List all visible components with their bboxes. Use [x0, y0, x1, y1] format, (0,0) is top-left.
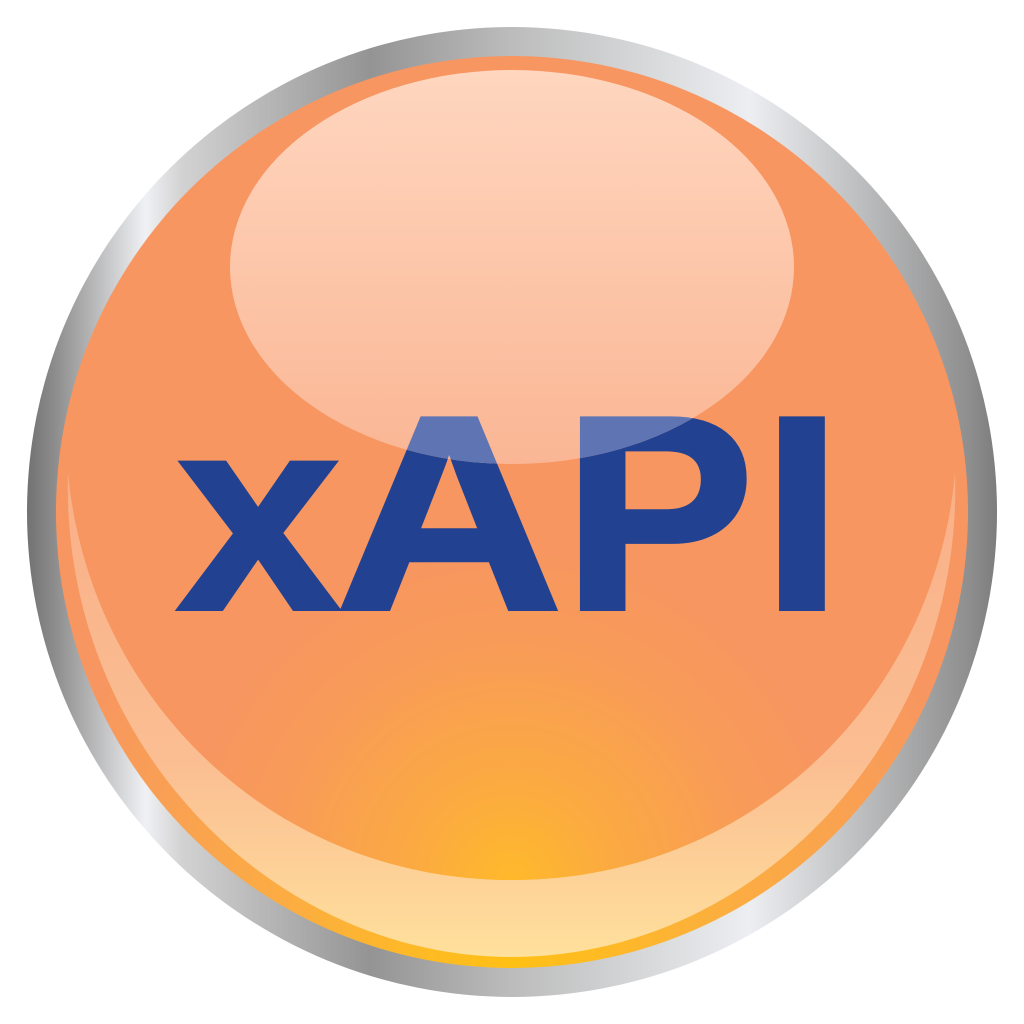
xAPI label under gloss: I [762, 358, 842, 668]
xAPI label: I [762, 358, 842, 668]
xAPI label under gloss: A [335, 358, 563, 668]
xAPI label [177, 358, 842, 668]
orange face with yellow rim [56, 56, 968, 968]
bottom crescent highlight [68, 472, 955, 957]
xAPI label under gloss: P [563, 359, 754, 668]
xAPI label: P [563, 359, 754, 668]
xAPI label: A [335, 358, 563, 668]
xAPI label: x [177, 360, 342, 668]
inner face glow [68, 472, 955, 880]
xAPI label under gloss [406, 416, 693, 464]
top gloss highlight [230, 70, 794, 464]
